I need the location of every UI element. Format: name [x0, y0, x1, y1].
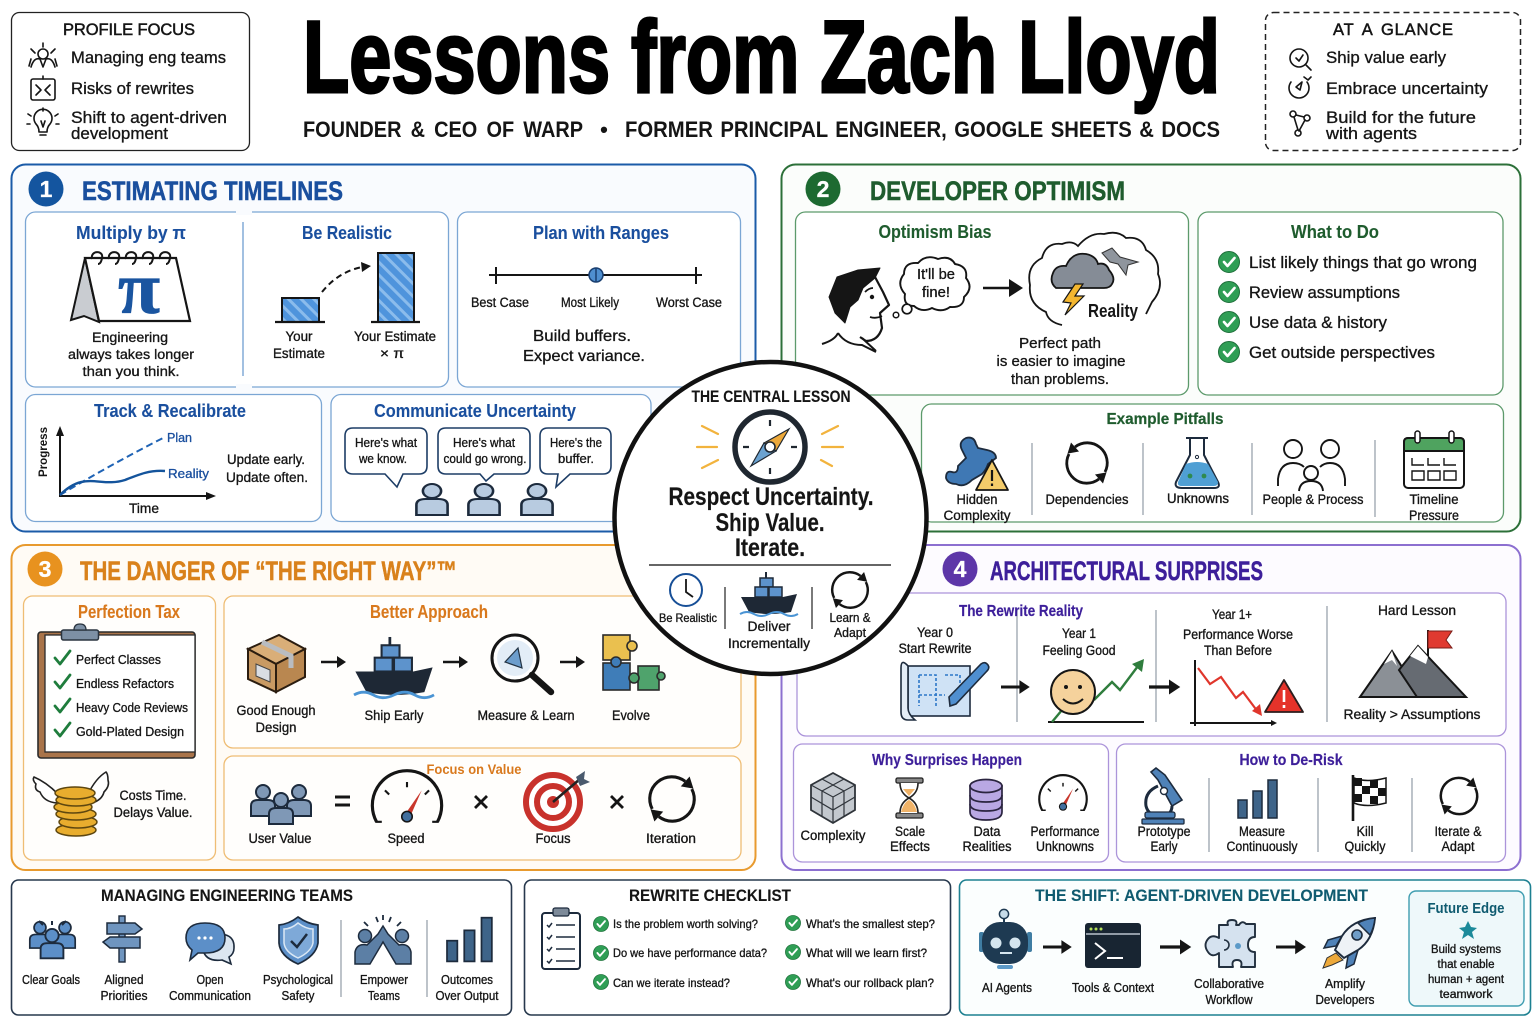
- item: year 0: Start Rewrite: [898, 641, 972, 656]
- heading: multiply by pi: Multiply by π: [76, 223, 186, 243]
- icon: clipboard: [542, 908, 580, 969]
- item: year 1 plus: Than Before: [1204, 643, 1272, 658]
- icon: clipboard checklist: Gold-Plated Design: [76, 724, 184, 739]
- subtitle: •: [600, 117, 608, 142]
- card: better approach: [224, 596, 741, 748]
- item: people and process: [1262, 440, 1364, 507]
- card: plan with ranges: Most Likely: [561, 295, 619, 310]
- item: learn and adapt loop: [830, 572, 871, 640]
- item: deliver incrementally ship: [728, 572, 810, 651]
- item: kill quickly: [1344, 775, 1386, 854]
- list: actions: List likely things that go wrong: [1249, 254, 1477, 272]
- callout: future edge: human + agent: [1428, 974, 1505, 986]
- item: iteration: [646, 776, 696, 846]
- item: clear goals: [22, 921, 80, 987]
- speech bubble: could go wrong: Here's what: [453, 436, 515, 450]
- text: costs time delays value: Delays Value.: [114, 805, 192, 820]
- text: respect uncertainty ship value iterate: Iterate.: [735, 534, 805, 562]
- card: track and recalibrate: Track & Recalibrate: [94, 401, 246, 421]
- item: empower teams: Teams: [368, 989, 400, 1003]
- item: user value: User Value: [248, 831, 312, 846]
- item: good enough design: Design: [256, 720, 296, 735]
- icon: thinking man: [822, 268, 889, 352]
- text: your estimate: [273, 329, 325, 361]
- item: good enough design: Good Enough: [236, 703, 316, 718]
- card: optimism bias: [796, 212, 1188, 395]
- item: evolve: [603, 635, 665, 723]
- panel: agent-driven development: [960, 880, 1530, 1015]
- card: why surprises happen: Why Surprises Happen: [872, 752, 1022, 769]
- heading: architectural surprises: ARCHITECTURAL SURPRISES: [990, 556, 1263, 586]
- callout: future edge: [1409, 891, 1524, 1006]
- list: rewrite questions left: Can we iterate instead?: [613, 976, 730, 990]
- list: rewrite questions right: [785, 915, 935, 990]
- item: scale effects: Scale: [895, 824, 925, 839]
- card: plan with ranges: Worst Case: [656, 295, 722, 310]
- item: year 1: Year 1: [1062, 626, 1096, 641]
- speech bubble: could go wrong: could go wrong.: [444, 452, 526, 466]
- badge 4: 4: [954, 556, 967, 582]
- subtitle: [303, 117, 1220, 142]
- card: plan with ranges: Best Case: [471, 295, 529, 310]
- text: costs time delays value: Costs Time.: [120, 788, 186, 803]
- card: why surprises happen: [794, 744, 1108, 862]
- text: update early and often: Update often.: [226, 470, 308, 485]
- heading: danger of the right way: THE DANGER OF “THE RIGHT WAY”™: [80, 556, 457, 586]
- icon: target ship: [1290, 49, 1311, 70]
- item: ship early: Ship Early: [364, 708, 424, 723]
- panel: rewrite checklist: [524, 880, 950, 1015]
- item: timeline pressure: Timeline: [1410, 492, 1458, 507]
- item: data realities: Data: [974, 824, 1001, 839]
- item: prototype early: Prototype: [1138, 824, 1190, 839]
- item: unknowns: [1167, 438, 1229, 506]
- text: build buffers: Build buffers.: [533, 328, 631, 345]
- icon: clipboard checklist: Endless Refactors: [76, 676, 174, 691]
- card: example pitfalls: [922, 404, 1504, 523]
- panel: agent-driven development: THE SHIFT: AGENT-DRIVEN DEVELOPMENT: [1035, 886, 1369, 905]
- card: example pitfalls: Example Pitfalls: [1106, 411, 1224, 428]
- item: clear goals: Clear Goals: [22, 973, 80, 987]
- item: amplify developers: [1316, 918, 1375, 1007]
- list: rewrite questions right: What's our rollback plan?: [806, 976, 934, 990]
- card: communicate uncertainty: [331, 394, 651, 522]
- item: scale effects: Effects: [890, 839, 930, 854]
- item: measure and learn: [478, 635, 574, 723]
- item: amplify developers: Amplify: [1325, 977, 1366, 991]
- icon: clipboard checklist: [38, 624, 195, 758]
- item: aligned priorities: [100, 916, 148, 1003]
- list: rewrite questions left: Is the problem worth solving?: [613, 917, 758, 931]
- item: hard lesson: Reality > Assumptions: [1344, 707, 1481, 722]
- heading: be realistic: Be Realistic: [302, 223, 392, 243]
- item: amplify developers: Developers: [1316, 993, 1374, 1007]
- panel: managing engineering teams: [12, 880, 512, 1015]
- panel: profile focus: Shift to agent-driven: [71, 109, 227, 127]
- badge 4: [942, 552, 978, 586]
- panel: at a glance: Ship value early: [1326, 49, 1447, 67]
- icon: lightbulb: [27, 108, 59, 135]
- panel: rewrite checklist: REWRITE CHECKLIST: [629, 886, 792, 905]
- callout: future edge: Future Edge: [1428, 900, 1504, 917]
- item: iteration: Iteration: [646, 831, 696, 846]
- heading: developer optimism: DEVELOPER OPTIMISM: [870, 176, 1125, 206]
- item: empower teams: [355, 915, 411, 1003]
- equals sign: [335, 797, 350, 805]
- subtitle: FORMER PRINCIPAL ENGINEER, GOOGLE SHEETS & DOCS: [625, 117, 1220, 142]
- card: better approach: Better Approach: [370, 602, 488, 622]
- item: scale effects: [890, 778, 930, 854]
- speech bubble: the buffer: [540, 428, 611, 487]
- item: data realities: Realities: [962, 839, 1012, 854]
- item: open communication: [169, 923, 251, 1003]
- item: year 1 plus: [1183, 607, 1303, 726]
- item: psychological safety: [263, 917, 333, 1003]
- panel: section 2 developer optimism: [782, 164, 1520, 532]
- badge 3: [28, 552, 62, 586]
- card: how to de-risk: How to De-Risk: [1240, 752, 1343, 769]
- icon: pi calendar: π: [118, 248, 160, 330]
- badge 3: 3: [39, 556, 51, 582]
- chart: estimate bars: [275, 253, 420, 322]
- thought bubble: it'll be fine: [893, 257, 970, 318]
- item: prototype early: [1138, 768, 1190, 854]
- item: dependencies: [1046, 442, 1129, 507]
- speech bubble: here's what we know: [345, 428, 427, 487]
- icon: managing teams: [29, 43, 57, 67]
- list: actions: [1218, 252, 1477, 362]
- panel: section 1 estimating timelines: [12, 164, 756, 532]
- item: kill quickly: Kill: [1356, 824, 1374, 839]
- icon: three people: [416, 484, 553, 515]
- text: costs time delays value: [114, 788, 192, 820]
- item: learn and adapt loop: Learn &: [830, 611, 871, 625]
- item: year 0: [898, 625, 989, 720]
- item: ship early: [354, 637, 434, 723]
- item: hidden complexity: Hidden: [956, 492, 998, 507]
- card: plan with ranges: Plan with Ranges: [533, 223, 669, 243]
- text: perfect path: than problems.: [1011, 372, 1109, 388]
- multiply sign: [611, 796, 623, 808]
- text: respect uncertainty ship value iterate: [668, 483, 874, 562]
- badge 2: 2: [817, 176, 829, 202]
- badge 1: [28, 172, 64, 206]
- panel: at a glance: with agents: [1325, 125, 1417, 143]
- item: deliver incrementally ship: Incrementally: [728, 636, 810, 651]
- item: open communication: Open: [196, 973, 224, 987]
- item: iterate and adapt: Iterate &: [1434, 824, 1482, 839]
- item: performance unknowns: [1030, 775, 1100, 854]
- icon: branching path: [1290, 111, 1310, 136]
- panel: profile focus: [12, 12, 250, 150]
- text: respect uncertainty ship value iterate: Ship Value.: [716, 509, 824, 537]
- icon: reality cloud: Reality: [1088, 301, 1138, 321]
- card: optimism bias: Optimism Bias: [878, 222, 992, 242]
- panel: section 4 architectural surprises: [782, 545, 1520, 870]
- card: perfection tax: [24, 596, 216, 860]
- arrow: [560, 656, 585, 668]
- text: respect uncertainty ship value iterate: Respect Uncertainty.: [668, 483, 874, 511]
- arrow: [1276, 940, 1306, 954]
- text: your estimate times pi: Your Estimate: [354, 329, 436, 344]
- card: focus on value: Focus on Value: [426, 761, 522, 777]
- item: performance unknowns: Unknowns: [1036, 839, 1094, 854]
- speech bubble: the buffer: Here's the: [550, 436, 602, 450]
- card: perfection tax: Perfection Tax: [78, 602, 180, 622]
- item: psychological safety: Psychological: [263, 973, 333, 987]
- arrow to reality: [983, 279, 1023, 297]
- badge 1: 1: [40, 176, 53, 202]
- text: perfect path: is easier to imagine: [996, 354, 1126, 370]
- panel: managing engineering teams: MANAGING ENGINEERING TEAMS: [101, 886, 353, 905]
- item: timeline pressure: [1404, 431, 1464, 523]
- card: rewrite reality and hard lesson: [797, 593, 1506, 736]
- arrow: [443, 656, 468, 668]
- icon: compass: [697, 412, 843, 482]
- card: what to do: [1198, 212, 1503, 395]
- thought bubble: it'll be fine: It'll be: [917, 266, 955, 283]
- central circle: the central lesson: THE CENTRAL LESSON: [692, 387, 850, 406]
- list: actions: Get outside perspectives: [1249, 344, 1435, 362]
- icon: reality cloud: [1029, 233, 1160, 325]
- item: ai agents: [979, 909, 1032, 995]
- item: year 0: Year 0: [917, 625, 953, 640]
- speech bubble: could go wrong: [438, 428, 530, 481]
- card: focus on value: [224, 756, 741, 860]
- item: open communication: Communication: [169, 989, 251, 1003]
- card: how to de-risk: [1116, 744, 1506, 862]
- text: build buffers: [523, 328, 645, 365]
- text: engineering takes longer: Engineering: [92, 330, 168, 345]
- panel: profile focus: Managing eng teams: [71, 49, 226, 67]
- arrow: [1001, 680, 1030, 694]
- panel: at a glance: Build for the future: [1326, 109, 1476, 127]
- title: Lessons from Zach Lloyd: [303, 0, 1220, 114]
- callout: future edge: teamwork: [1440, 989, 1493, 1001]
- card: plan with ranges: [458, 212, 740, 387]
- item: aligned priorities: Aligned: [104, 973, 144, 987]
- arrow: [321, 656, 346, 668]
- card: track and recalibrate: [26, 394, 322, 522]
- item: outcomes over output: Outcomes: [441, 973, 493, 987]
- chart: plan vs reality: Time: [129, 501, 159, 516]
- item: ai agents: AI Agents: [982, 981, 1032, 995]
- item: outcomes over output: Over Output: [436, 989, 499, 1003]
- speech bubble: the buffer: buffer.: [558, 452, 594, 466]
- speech bubble: here's what we know: we know.: [358, 452, 407, 466]
- item: iterate and adapt: Adapt: [1442, 839, 1475, 854]
- item: kill quickly: Quickly: [1344, 839, 1386, 854]
- text: your estimate: Your: [286, 329, 313, 344]
- list: rewrite questions right: What will we learn first?: [806, 946, 927, 960]
- speech bubble: here's what we know: Here's what: [355, 436, 417, 450]
- item: user value: [248, 785, 312, 846]
- panel: profile focus: development: [71, 125, 168, 143]
- item: timeline pressure: Pressure: [1409, 508, 1459, 523]
- item: collaborative workflow: Workflow: [1206, 993, 1253, 1007]
- item: psychological safety: Safety: [282, 989, 315, 1003]
- item: performance unknowns: Performance: [1030, 824, 1100, 839]
- item: hard lesson: Hard Lesson: [1378, 603, 1456, 618]
- list: rewrite questions right: What's the smallest step?: [806, 917, 935, 931]
- item: complexity: [800, 773, 866, 843]
- arrow: [1149, 680, 1180, 694]
- item: dependencies: Dependencies: [1046, 492, 1129, 507]
- item: iterate and adapt: [1434, 778, 1482, 854]
- item: empower teams: Empower: [360, 973, 408, 987]
- panel: at a glance: AT A GLANCE: [1333, 21, 1453, 39]
- chart: plan vs reality: Progress: [36, 427, 50, 477]
- panel: section 3 danger of the right way: [12, 545, 756, 870]
- chart: plan vs reality: [36, 426, 216, 516]
- text: build buffers: Expect variance.: [523, 348, 645, 365]
- list: rewrite questions left: Do we have performance data?: [613, 946, 767, 960]
- item: speed: [372, 771, 442, 846]
- icon: winged coins: [33, 772, 109, 836]
- chart: plan vs reality: Reality: [168, 466, 210, 481]
- item: deliver incrementally ship: Deliver: [748, 619, 791, 634]
- item: year 1: Feeling Good: [1042, 643, 1116, 658]
- card: multiply by pi and be realistic: [26, 209, 448, 390]
- list: actions: Use data & history: [1249, 314, 1388, 332]
- item: prototype early: Early: [1150, 839, 1178, 854]
- multiply sign: [475, 796, 487, 808]
- item: people and process: People & Process: [1262, 492, 1364, 507]
- item: year 1 plus: Performance Worse: [1183, 627, 1293, 642]
- item: collaborative workflow: Collaborative: [1194, 977, 1264, 991]
- icon: pi calendar: [71, 248, 190, 330]
- icon: compass heart: [1289, 77, 1311, 98]
- item: good enough design: [236, 635, 316, 735]
- text: engineering takes longer: than you think.: [82, 364, 180, 379]
- text: perfect path: [996, 336, 1126, 388]
- item: year 1 plus: Year 1+: [1212, 607, 1252, 622]
- thought bubble: it'll be fine: fine!: [922, 284, 950, 301]
- item: measure continuously: Continuously: [1226, 839, 1298, 854]
- card: what to do: What to Do: [1291, 222, 1379, 242]
- item: speed: Speed: [388, 831, 424, 846]
- chart: plan vs reality: Plan: [167, 430, 192, 445]
- panel: profile focus: PROFILE FOCUS: [63, 21, 195, 39]
- item: hard lesson: [1344, 603, 1481, 722]
- list: rewrite questions left: [593, 916, 767, 990]
- panel: at a glance: Embrace uncertainty: [1326, 80, 1489, 98]
- panel: profile focus: Risks of rewrites: [71, 80, 194, 98]
- item: unknowns: Unknowns: [1167, 491, 1229, 506]
- item: measure continuously: [1226, 780, 1298, 854]
- item: evolve: Evolve: [612, 708, 650, 723]
- arrow: [1043, 940, 1072, 954]
- item: focus: [526, 771, 590, 846]
- card: communicate uncertainty: Communicate Uncertainty: [374, 401, 576, 421]
- callout: future edge: Build systems: [1431, 944, 1501, 956]
- panel: at a glance: [1266, 12, 1520, 150]
- list: actions: Review assumptions: [1249, 284, 1400, 302]
- item: focus: Focus: [536, 831, 571, 846]
- callout: future edge: that enable: [1438, 959, 1494, 971]
- item: complexity: Complexity: [800, 828, 866, 843]
- arrow: [1160, 940, 1191, 954]
- text: your estimate times pi: [354, 329, 436, 361]
- text: engineering takes longer: always takes longer: [68, 347, 195, 362]
- item: tools and context: [1072, 923, 1154, 995]
- badge 2: [806, 172, 840, 206]
- item: collaborative workflow: [1194, 920, 1264, 1007]
- item: be realistic clock: Be Realistic: [659, 611, 717, 625]
- text: your estimate: Estimate: [273, 346, 325, 361]
- subtitle: FOUNDER & CEO OF WARP: [303, 117, 583, 142]
- item: be realistic clock: [659, 574, 717, 625]
- item: outcomes over output: [436, 918, 499, 1003]
- central circle: the central lesson: [614, 362, 928, 676]
- card: rewrite reality and hard lesson: The Rewrite Reality: [959, 603, 1083, 620]
- item: aligned priorities: Priorities: [100, 989, 148, 1003]
- text: update early and often: [226, 452, 308, 485]
- icon: rewrite risk: [31, 76, 55, 100]
- text: your estimate times pi: × π: [380, 346, 404, 361]
- icon: clipboard checklist: Perfect Classes: [76, 652, 161, 667]
- item: learn and adapt loop: Adapt: [834, 626, 867, 640]
- chart: range line: [489, 267, 702, 284]
- heading: estimating timelines: ESTIMATING TIMELINES: [82, 176, 343, 206]
- item: measure and learn: Measure & Learn: [478, 708, 574, 723]
- text: engineering takes longer: [68, 330, 195, 379]
- item: data realities: [962, 780, 1012, 854]
- item: measure continuously: Measure: [1239, 824, 1285, 839]
- item: hidden complexity: Complexity: [944, 508, 1011, 523]
- text: update early and often: Update early.: [227, 452, 305, 467]
- text: perfect path: Perfect path: [1019, 336, 1101, 352]
- item: hidden complexity: [944, 438, 1011, 523]
- item: tools and context: Tools & Context: [1072, 981, 1154, 995]
- item: year 1: [1042, 626, 1144, 722]
- icon: clipboard checklist: Heavy Code Reviews: [76, 700, 188, 715]
